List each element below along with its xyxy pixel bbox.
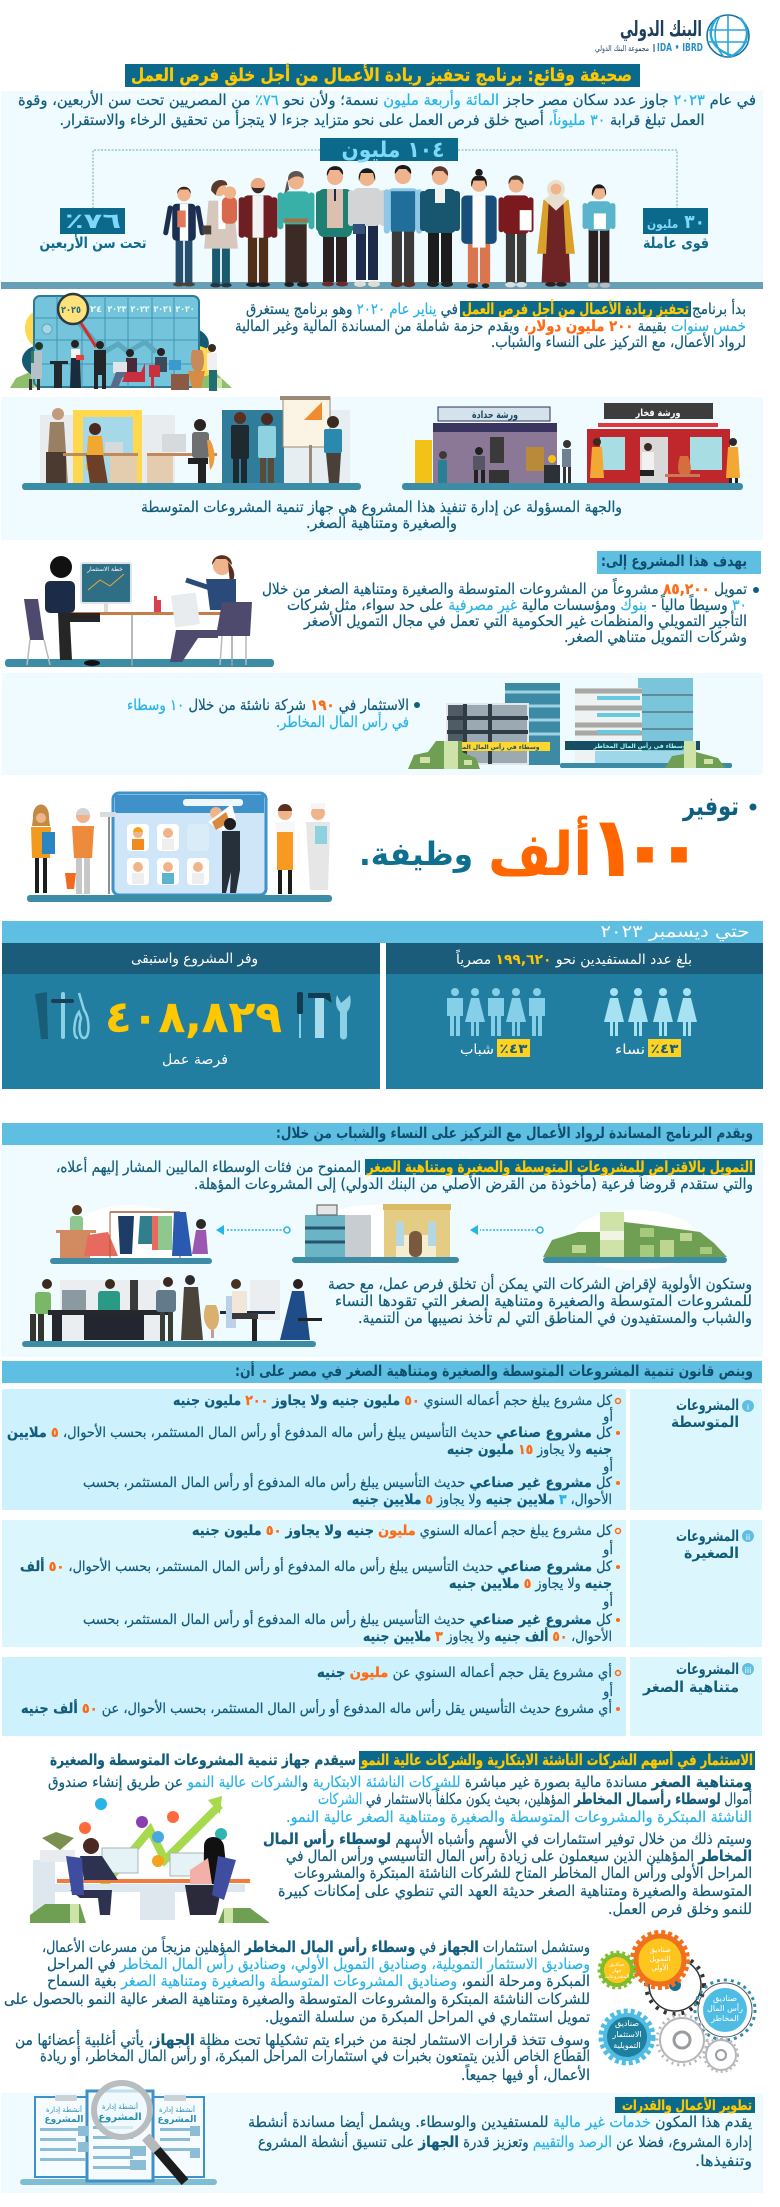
text block: investment scope: المبكرة ومرحلة النمو، وصناديق المشروعات المتوسطة والصغيرة ومتناهية الصغر بغية السماح bbox=[47, 1972, 590, 1990]
text block: equity investment: وسيتم ذلك من خلال توفير استثمارات في الأسهم وأشباه الأسهم لوسطاء رأس المال bbox=[263, 1829, 752, 1849]
illustration: project management clipboards: أنشطة إدارة bbox=[46, 2105, 82, 2114]
label: micro enterprises: المشروعات bbox=[676, 1660, 739, 1678]
text block: medium criteria: أو bbox=[602, 1407, 613, 1425]
stat: 104 million: ١٠٤ مليون bbox=[342, 138, 444, 163]
text block: capacity description: إدارة المشروع، فضلا عن الرصد والتقييم وتعزيز قدرة الجهاز على تنسيق أنشطة المشروع bbox=[258, 2132, 752, 2151]
illustration: fund gears: المشروعات bbox=[605, 1974, 629, 1980]
text block: lending description bbox=[56, 1157, 755, 1194]
illustration: fund gears: صناديق bbox=[649, 1946, 671, 1954]
illustration: twelve people bbox=[163, 165, 615, 288]
panel: results to December 2023: حتي ديسمبر ٢٠٢٣ bbox=[600, 922, 750, 942]
text block: equity investment: للنمو وخلق فرص العمل. bbox=[608, 1900, 752, 1918]
label: micro enterprises: متناهية الصغر bbox=[642, 1678, 739, 1696]
panel: beneficiaries: بلغ عدد المستفيدين نحو ١٩٩,٦٢٠ مصرياً bbox=[455, 949, 692, 968]
illustration: fund gears: جهاز bbox=[611, 1968, 622, 1974]
text block: financing aim: ٣٠ وسيطاً مالياً - بنوك ومؤسسات مالية غير مصرفية على حد سواء، مثل شركات bbox=[287, 594, 747, 614]
panel: jobs created: وفر المشروع واستبقى bbox=[131, 951, 258, 967]
text block: equity investment: ومتناهية الصغر مساندة مالية بصورة غير مباشرة للشركات الناشئة الابتكارية والشركات عالية النمو عن طريق إنشاء صندوق bbox=[48, 1773, 752, 1791]
illustration: project management clipboards: أنشطة إدارة bbox=[159, 2105, 195, 2114]
text block: medium criteria: جنيه ولا يجاوز ١٥ مليون جنيه bbox=[447, 1442, 612, 1458]
illustration: fund gears: الاستثمار bbox=[611, 2030, 642, 2039]
text block: investment scope: للشركات الناشئة المبتكرة والمشروعات المتوسطة والصغيرة ومتناهية الصغر عالية النمو بالحصول على bbox=[4, 1990, 590, 2008]
logo: World Bank bbox=[595, 15, 749, 57]
illustration: project management clipboards: المشروع bbox=[44, 2115, 84, 2125]
illustration: financing meeting bbox=[5, 555, 274, 667]
panel: small enterprises bbox=[2, 1520, 762, 1647]
label: 43 percent youth: ٤٣٪ bbox=[499, 1042, 528, 1057]
illustration: office buildings and money: وسطاء في رأس المال المخاطر bbox=[445, 743, 540, 751]
arrow: money to intermediaries bbox=[470, 1225, 543, 1235]
label: medium enterprises bbox=[671, 1396, 754, 1431]
illustration: project management clipboards: أنشطة إدارة bbox=[102, 2102, 138, 2111]
text block: micro criteria bbox=[21, 1663, 620, 1717]
text block: startups aim: الاستثمار في ١٩٠ شركة ناشئة من خلال ١٠ وسطاء bbox=[127, 696, 409, 715]
icon group: women bbox=[604, 988, 697, 1036]
text block: small criteria: أو bbox=[602, 1592, 613, 1610]
text block: medium criteria: الأحوال، ٣ ملايين جنيه ولا يجاوز ٥ ملايين جنيه bbox=[352, 1490, 612, 1508]
label: small enterprises: المشروعات bbox=[676, 1527, 739, 1545]
label: medium enterprises: المتوسطة bbox=[671, 1413, 739, 1431]
text block: priority for lending: والشباب والمستفيدون في المناطق التي لم تأخذ نصيبها من التنمية. bbox=[358, 1307, 752, 1328]
stat: 100 thousand jobs: وظيفة. bbox=[359, 835, 473, 873]
text block: programme description bbox=[235, 299, 746, 351]
illustration: programme timeline board: ٢٠٢٣ bbox=[108, 305, 127, 315]
panel: business and capacity development bbox=[1, 2083, 763, 2193]
panel: jobs created: فرصة عمل bbox=[162, 1052, 228, 1068]
heading: project aims: يهدف هذا المشروع إلى: bbox=[601, 552, 747, 570]
illustration: pottery workshop bbox=[587, 403, 740, 486]
text block: equity investment: المتوسطة والصغيرة ومتناهية الصغر حديثة العهد التي تنطوي على إمكانات كبيرة bbox=[278, 1882, 752, 1901]
illustration: programme timeline board: ٢٠٢١ bbox=[154, 305, 172, 315]
illustration: presentation scene bbox=[222, 396, 350, 487]
text block: small criteria: أو bbox=[602, 1540, 613, 1558]
illustration: fund gears: المخاطر bbox=[710, 2014, 739, 2023]
text block: programme description: في يناير عام ٢٠٢٠ وهو برنامج يستغرق bbox=[246, 300, 458, 319]
text block: implementing agency: والجهة المسؤولة عن إدارة تنفيذ هذا المشروع هي جهاز تنمية المشروعات المتوسطة bbox=[141, 498, 622, 517]
illustration: fund gears: رأس المال bbox=[707, 2003, 743, 2013]
illustration: fund gears bbox=[599, 1932, 755, 2072]
illustration: clothes maker bbox=[50, 1205, 212, 1265]
illustration: fund gears: صناديق bbox=[615, 2019, 639, 2028]
panel: implementing agency and workshops bbox=[1, 396, 763, 540]
text block: investment scope: تمويل استثماري في المراحل المبكرة من سلسلة التمويل. bbox=[265, 2008, 590, 2027]
text block: investment scope: وسوف تتخذ قرارات الاستثمار لجنة من خبراء يتم تشكيلها تحت مظلة الجهاز، يأتي أغلبية أعضائها من bbox=[15, 2029, 590, 2050]
panel: jobs created bbox=[2, 943, 380, 1089]
text block: financing aim: وشركات التمويل متناهي الصغر. bbox=[564, 628, 747, 647]
stat: 100 thousand jobs: ٠ bbox=[618, 797, 672, 902]
label: 43 percent women bbox=[615, 1039, 681, 1058]
logo: World Bank: IDA • IBRD bbox=[657, 41, 703, 54]
text block: financing aim: التأجير التمويلي والمنظمات غير الحكومية التي تعمل في مجال التمويل الأصغر bbox=[303, 610, 747, 631]
text block: capacity description: يقدم هذا المكون خدمات غير مالية للمستفيدين والوسطاء. ويشمل أيضا مساندة أنشطة bbox=[248, 2112, 752, 2131]
icon group: tools right bbox=[297, 992, 351, 1040]
stat: 100 thousand jobs: ألف bbox=[488, 815, 592, 890]
logo: World Bank: مجموعة البنك الدولي bbox=[595, 44, 649, 53]
stat: 76 percent: تحت سن الأربعين bbox=[40, 234, 146, 252]
illustration: fund gears: الأولي bbox=[651, 1963, 669, 1972]
text block: small criteria: الأحوال، ٥٠ ألف جنيه ولا يجاوز ٣ ملايين جنيه bbox=[363, 1627, 612, 1645]
panel: population bbox=[1, 90, 763, 289]
logo: World Bank: البنك الدولي bbox=[620, 16, 702, 41]
panel: micro enterprises bbox=[2, 1657, 762, 1736]
text block: capacity description bbox=[248, 2112, 752, 2170]
illustration: fund gears: صناديق bbox=[609, 1962, 625, 1968]
text block: small criteria: جنيه ولا يجاوز ٥ ملايين جنيه bbox=[449, 1576, 612, 1592]
panel: MSME financing bbox=[1, 1145, 763, 1357]
text block: medium criteria: أو bbox=[602, 1457, 613, 1475]
illustration: project management clipboards: المشروع bbox=[98, 2112, 142, 2123]
label: 43 percent youth: شباب bbox=[460, 1042, 494, 1058]
illustration: investors at desks bbox=[30, 1796, 270, 1923]
text block: equity investment: سيقدم جهاز تنمية المشروعات المتوسطة والصغيرة bbox=[50, 1751, 356, 1769]
stat: 100 thousand jobs bbox=[359, 792, 756, 902]
text block: medium criteria: كل مشروع غير صناعي حديث التأسيس يبلغ رأس ماله المدفوع أو رأس المال المستثمر، بحسب bbox=[83, 1472, 612, 1491]
text block: equity investment: أموال لوسطاء رأسمال المخاطر المؤهلين، بحيث يكون مكلفاً بالاستثمار في الشركات bbox=[318, 1788, 752, 1809]
text block: medium criteria bbox=[7, 1391, 620, 1508]
label: 43 percent youth bbox=[460, 1039, 530, 1058]
text block: introduction: العمل تبلغ قرابة ٣٠ مليوناً، أصبح خلق فرص العمل على نحو متزايد جزءا لا يتجزأ من تحقيق الرخاء والاستقرار. bbox=[60, 109, 704, 129]
stat: 76 percent: ٧٦٪ bbox=[65, 209, 121, 233]
illustration: programme timeline board: ٢٤ bbox=[90, 305, 102, 315]
panel: jobs created: ٤٠٨,٨٢٩ bbox=[105, 992, 282, 1043]
stat: 30 million workforce: قوى عاملة bbox=[643, 234, 709, 252]
label: medium enterprises: i bbox=[747, 1403, 749, 1412]
label: micro enterprises: iii bbox=[745, 1666, 751, 1675]
illustration: fund gears: التمويلية bbox=[613, 2041, 641, 2050]
text block: priority for lending: للمشروعات المتوسطة والصغيرة ومتناهية الصغر التي تقودها النساء bbox=[335, 1292, 752, 1311]
icon group: youth bbox=[447, 988, 545, 1036]
stat: 100 thousand jobs: ١ bbox=[587, 798, 639, 896]
illustration: project management clipboards: المشروع bbox=[158, 2115, 196, 2125]
text block: introduction: في عام ٢٠٢٣ جاوز عدد سكان مصر حاجز المائة وأربعة مليون نسمة؛ ولأن نحو ٧٦٪ من المصريين تحت سن الأربعين، وقوة bbox=[18, 90, 756, 110]
text block: micro criteria: أو bbox=[602, 1682, 613, 1700]
stat: 30 million workforce bbox=[643, 208, 709, 252]
illustration: jobs recruitment board bbox=[27, 793, 332, 902]
text block: introduction bbox=[18, 90, 756, 129]
illustration: small business owners bbox=[22, 1275, 322, 1347]
label: 43 percent women: نساء bbox=[615, 1042, 645, 1058]
label: small enterprises: ii bbox=[746, 1533, 750, 1542]
text block: programme description: بدأ برنامج bbox=[692, 299, 746, 318]
heading: programme support bbox=[2, 1123, 763, 1145]
title: صحيفة وقائع: برنامج تحفيز ريادة الأعمال من أجل خلق فرص العمل bbox=[131, 63, 632, 86]
illustration: blacksmith workshop: ورشة حدادة bbox=[472, 410, 518, 421]
illustration: programme timeline board: ٢٠٢٠ bbox=[176, 305, 194, 315]
illustration: fund gears: التمويل bbox=[649, 1955, 671, 1963]
text block: investment scope: القطاع الخاص الذين يتمتعون بخبرات في استثمارات المراحل المبكرة، أو رأس المال المخاطر، أو ريادة bbox=[40, 2046, 590, 2066]
illustration: financing meeting: خطة الاستثمار bbox=[86, 566, 123, 573]
text block: equity investment: الناشئة المبتكرة والمشروعات المتوسطة والصغيرة ومتناهية الصغر عالية النمو. bbox=[286, 1808, 752, 1826]
arrow: intermediaries to enterprises bbox=[216, 1225, 290, 1235]
illustration: blacksmith workshop bbox=[415, 407, 571, 488]
text block: lending description: الممنوح من فئات الوسطاء الماليين المشار إليهم أعلاه، bbox=[56, 1157, 361, 1176]
text block: implementing agency: والصغيرة ومتناهية الصغر. bbox=[306, 514, 457, 532]
label: 43 percent women: ٤٣٪ bbox=[650, 1042, 679, 1057]
icon: globe bbox=[707, 15, 749, 57]
icon group: tools left bbox=[35, 992, 88, 1039]
label: micro enterprises bbox=[642, 1660, 754, 1696]
panel: results to December 2023 bbox=[2, 921, 763, 1089]
text block: equity investment bbox=[48, 1750, 755, 1918]
stat: 100 thousand jobs: توفير bbox=[681, 792, 739, 822]
text block: small criteria bbox=[20, 1521, 620, 1645]
text block: financing aim: تمويل ٨٥,٢٠٠ مشروعاً من المشروعات المتوسطة والصغيرة ومتناهية الصغر من خلال bbox=[262, 578, 747, 598]
text block: startups aim: في رأس المال المخاطر. bbox=[276, 712, 409, 732]
illustration: programme timeline board: ٢٠٢٥ bbox=[61, 305, 81, 316]
illustration: money pile bbox=[543, 1210, 727, 1270]
stat: 30 million workforce: ٣٠ مليون bbox=[647, 211, 705, 233]
text block: capacity description: وتنفيذها. bbox=[695, 2152, 752, 2170]
label: small enterprises bbox=[676, 1527, 754, 1562]
illustration: pottery workshop: ورشة فخار bbox=[635, 408, 680, 419]
illustration: programme timeline board: ٢٠٢٢ bbox=[130, 305, 150, 315]
text block: micro criteria: أي مشروع يقل حجم أعماله السنوي عن مليون جنيه bbox=[317, 1663, 612, 1681]
illustration: office buildings and money bbox=[408, 678, 732, 769]
text block: startups aim bbox=[127, 696, 420, 732]
panel: beneficiaries bbox=[386, 943, 763, 1089]
text block: implementing agency bbox=[141, 498, 622, 532]
illustration: fund gears: صناديق bbox=[713, 1994, 737, 2003]
text block: micro criteria: أي مشروع حديث التأسيس يقل رأس ماله المدفوع أو رأس المال المستثمر، بحسب الأحوال، عن ٥٠ ألف جنيه bbox=[21, 1698, 612, 1717]
illustration: office scene bbox=[40, 408, 217, 487]
text block: investment scope: وصناديق الاستثمار التمويلية، وصناديق التمويل الأولي، وصناديق رأس المال المخاطر في المراحل bbox=[47, 1954, 590, 1974]
text block: investment scope: الأعمال، أو فيها جميعاً. bbox=[461, 2064, 590, 2084]
text block: programme description: خمس سنوات بقيمة ٢٠٠ مليون دولار، ويقدم حزمة شاملة من المساندة المالية وغير المالية bbox=[235, 317, 746, 335]
text block: investment scope bbox=[4, 1936, 590, 2084]
text block: medium criteria: كل مشروع يبلغ حجم أعماله السنوي ٥٠ مليون جنيه ولا يجاوز ٢٠٠ مليون جنيه bbox=[173, 1391, 612, 1409]
illustration: office buildings and money: وسطاء في رأس المال المخاطر bbox=[592, 742, 687, 750]
illustration: project management clipboards bbox=[20, 2083, 217, 2185]
stat: 100 thousand jobs: ٠ bbox=[652, 797, 706, 902]
illustration: programme timeline board bbox=[10, 294, 232, 391]
text block: investment scope: وستشمل استثمارات الجهاز في وسطاء رأس المال المخاطر المؤهلين مزيجاً من مسرعات الأعمال، bbox=[42, 1936, 590, 1957]
label: small enterprises: الصغيرة bbox=[684, 1544, 739, 1562]
text block: priority for lending bbox=[328, 1274, 752, 1328]
text block: programme description: لرواد الأعمال، مع التركيز على النساء والشباب. bbox=[491, 332, 746, 351]
illustration: bank and financial institution bbox=[292, 1204, 459, 1265]
text block: medium criteria: كل مشروع صناعي حديث التأسيس يبلغ رأس ماله المدفوع أو رأس المال المستثمر، بحسب الأحوال، ٥ ملايين bbox=[7, 1422, 612, 1441]
text block: small criteria: كل مشروع غير صناعي حديث التأسيس يبلغ رأس ماله المدفوع أو رأس المال المستثمر، بحسب bbox=[83, 1609, 612, 1628]
text block: small criteria: كل مشروع صناعي حديث التأسيس يبلغ رأس ماله المدفوع أو رأس المال المستثمر، بحسب الأحوال، ٥٠ ألف bbox=[20, 1556, 612, 1575]
label: medium enterprises: المشروعات bbox=[676, 1396, 739, 1414]
panel: startups investment bbox=[2, 673, 763, 775]
stat: 76 percent bbox=[40, 208, 146, 252]
panel: medium enterprises bbox=[2, 1389, 762, 1510]
text block: financing aim bbox=[262, 578, 759, 647]
text block: small criteria: كل مشروع يبلغ حجم أعماله السنوي مليون جنيه ولا يجاوز ٥٠ مليون جنيه bbox=[192, 1521, 612, 1539]
heading: law definition bbox=[2, 1361, 762, 1383]
text block: equity investment: المخاطر المؤهلين الذين سيعملون على زيادة رأس المال التأسيسي ورأس المال في bbox=[286, 1845, 752, 1866]
text block: programme description: تحفيز ريادة الأعمال من أجل فرص العمل bbox=[462, 299, 689, 318]
